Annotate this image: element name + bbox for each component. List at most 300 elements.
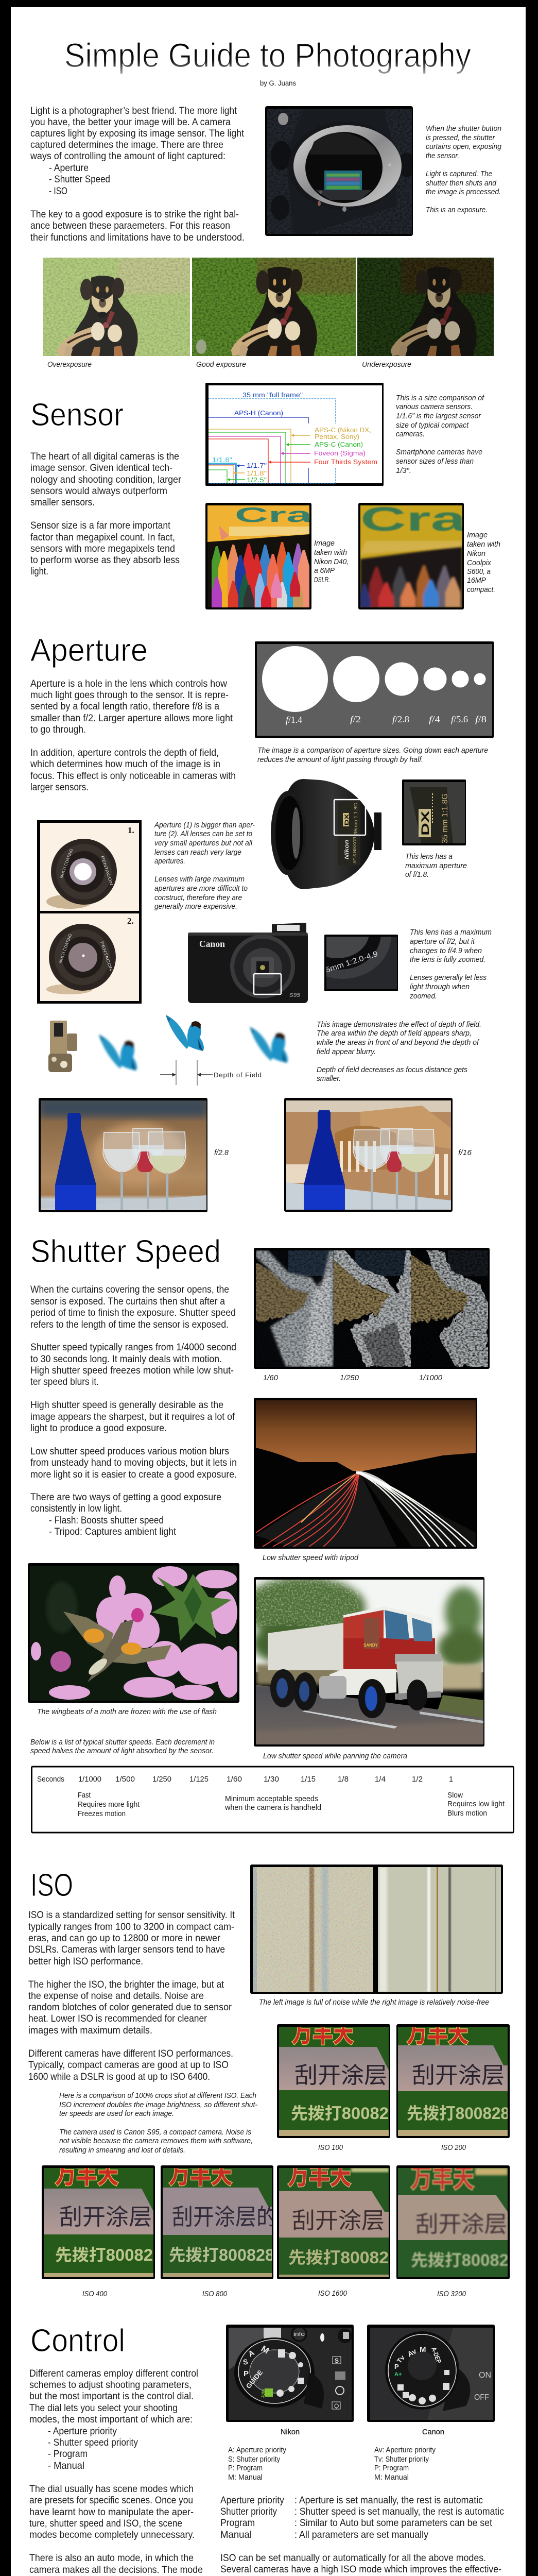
caption: list of shutter speeds xyxy=(30,1738,215,1755)
caption: sensor sizes: cameras. xyxy=(396,430,425,438)
control text block: - Shutter speed priority xyxy=(48,2437,138,2448)
photo: Nikon mode dial xyxy=(226,2325,354,2422)
shutter speed text block: High shutter speed is generally desirable as the xyxy=(30,1400,223,1411)
photo: Canon mode dial: OFF xyxy=(474,2393,489,2402)
intro text block: ways of controlling the amount of light captured: xyxy=(30,151,225,162)
caption: f/2 to f/4.9 lens: Lenses generally let less xyxy=(410,974,487,982)
control text block: - Manual xyxy=(48,2461,84,2471)
caption: aperture sizes xyxy=(154,821,255,911)
icon: sharp butterfly in focus xyxy=(166,1015,204,1051)
caption: sensor sizes: size of typical compact xyxy=(396,421,469,430)
caption: ISO crops: resulting in smearing and lost of details. xyxy=(59,2146,185,2155)
caption: f/2 to f/4.9 lens xyxy=(409,928,492,1001)
Nikon mode list: S: Shutter priority xyxy=(228,2455,281,2464)
control text block: modes, the most important of which are: xyxy=(29,2414,193,2425)
shutter speed table: Blurs motion xyxy=(447,1809,487,1818)
intro text block: ance between these paraemeters. For this reason xyxy=(30,221,230,231)
photo: crayons from Nikon D40 xyxy=(205,503,313,609)
intro text block: their functions and limitations have to be understood. xyxy=(30,232,245,243)
intro text block xyxy=(30,106,245,243)
caption: noise comparison: The left image is full of noise while the right image is relatively noise-free xyxy=(259,1998,489,2007)
shutter speed table: 1/500 xyxy=(115,1775,135,1784)
photo: Canon mode dial: Av xyxy=(406,2347,418,2359)
label: Canon: Canon xyxy=(422,2428,444,2436)
crop: ISO 800 xyxy=(161,2160,277,2279)
shutter speed text block xyxy=(30,1284,237,1537)
caption: aperture sizes: Lenses with large maximum xyxy=(154,875,245,884)
caption: Coolpix S600: taken with xyxy=(467,540,500,549)
crop: ISO 100 xyxy=(277,2019,390,2138)
photo: lens marking close-up: DX xyxy=(420,811,431,836)
sensor text block: sensors with more megapixels tend xyxy=(30,544,175,554)
control text block: schemes to adjust shooting parameters, xyxy=(29,2380,192,2391)
icon: camera side view xyxy=(48,1021,77,1072)
Canon mode list: Av: Aperture priority xyxy=(374,2446,436,2454)
shutter speed text block: High shutter speed freezes motion while low shut- xyxy=(30,1365,234,1376)
caption: depth of field: This image demonstrates the effect of depth of field. xyxy=(317,1021,481,1029)
shutter speed table: when the camera is handheld xyxy=(224,1804,321,1812)
shutter speed text block: - Flash: Boosts shutter speed xyxy=(49,1515,164,1526)
photo: crayons from Coolpix S600 xyxy=(358,500,467,609)
photo: Nikon mode dial: S xyxy=(242,2358,249,2366)
ISO text block: heat. Lower ISO is recommended for cleaner xyxy=(28,2013,207,2024)
crop: ISO 200: 万丰天 xyxy=(407,2019,468,2048)
caption: moth: The wingbeats of a moth are frozen with the use of flash xyxy=(37,1708,217,1716)
aperture text block: In addition, aperture controls the depth of field, xyxy=(30,748,219,758)
ISO mode note xyxy=(220,2553,501,2576)
sensor size comparison chart: 1/1.8" xyxy=(247,469,267,477)
caption: Nikon D40: Nikon D40, xyxy=(314,558,349,566)
ISO text block: Different cameras have different ISO performances. xyxy=(28,2048,233,2059)
caption: exposure: This is an exposure. xyxy=(426,206,488,214)
photo: waterfall at three shutter speeds xyxy=(252,1248,490,1369)
caption: sensor sizes: 1/3″. xyxy=(396,467,411,475)
photo: Canon lens marking close-up: 5mm 1:2.0-4.9 xyxy=(324,950,379,975)
ISO text block: ISO is a standardized setting for sensor sensitivity. It xyxy=(28,1910,235,1921)
aperture text block: larger sensors. xyxy=(30,782,89,793)
Nikon mode list: P: Program xyxy=(228,2464,263,2472)
sensor size comparison chart: 35 mm "full frame" xyxy=(242,391,303,399)
aperture text block: Aperture is a hole in the lens which controls how xyxy=(30,679,227,689)
sensor size comparison chart: APS-C (Nikon DX, xyxy=(315,426,371,434)
heading: Aperture: Aperture xyxy=(30,633,148,668)
shutter speed text block: consistently in low light. xyxy=(30,1503,122,1514)
shutter speed table: 1/2 xyxy=(412,1775,423,1784)
caption: depth of field: Depth of field decreases as focus distance gets xyxy=(317,1066,467,1074)
mode definitions table: : Shutter speed is set manually, the rest is automatic xyxy=(294,2506,504,2517)
ISO 400 to 3200 labels: ISO 1600 xyxy=(318,2290,347,2298)
ISO text block: Typically, compact cameras are good at up to ISO xyxy=(28,2060,229,2071)
shutter speed text block: to 30 seconds long. It mainly deals with motion. xyxy=(30,1354,222,1365)
sensor text block: factor than megapixel count. In fact, xyxy=(30,532,175,543)
ISO 100 and 200 labels: ISO 100 xyxy=(318,2144,343,2152)
caption: ISO crops: Here is a comparison of 100% crops shot at different ISO. Each xyxy=(59,2092,256,2100)
ISO text block: eras, and can go up to 12800 or more in newer xyxy=(28,1933,221,1944)
sensor text block xyxy=(30,451,182,577)
sensor size comparison chart xyxy=(205,383,384,486)
mode definitions table: Manual xyxy=(220,2530,252,2540)
ISO 100 and 200 labels xyxy=(318,2144,466,2152)
photo: Canon mode dial: ON xyxy=(479,2371,491,2380)
ISO text block: The higher the ISO, the brighter the image, but at xyxy=(28,1979,224,1990)
caption: Coolpix S600: Nikon xyxy=(467,550,485,558)
aperture text block: sented by a focal length ratio, therefore f/8 is a xyxy=(30,701,219,712)
shutter labels xyxy=(263,1374,442,1382)
caption: Coolpix S600: compact. xyxy=(467,586,495,594)
shutter speed table xyxy=(32,1767,514,1833)
photo: Nikon 35mm lens: DX xyxy=(344,814,350,825)
aperture text block: which determines how much of the image is in xyxy=(30,759,220,770)
crop: ISO 800: 万丰天 xyxy=(169,2160,232,2190)
photo: Nikon mode dial: P xyxy=(244,2369,249,2378)
photo: hawk moth on flowers xyxy=(28,1563,241,1703)
sensor size comparison chart: Four Thirds System xyxy=(314,458,377,466)
photo: bottle and glasses at f/2.8 xyxy=(39,1098,207,1216)
caption: depth of field: The area within the depth of field appears sharp, xyxy=(317,1029,472,1038)
intro text block: you have, the better your image will be. A camera xyxy=(30,117,231,128)
control text block: There is also an auto mode, in which the xyxy=(29,2553,194,2564)
caption: exposure: shutter then shuts and xyxy=(426,179,497,188)
caption: exposure: When the shutter button xyxy=(426,125,501,133)
aperture text block: to go through. xyxy=(30,724,86,735)
crop: ISO 3200: 万丰天 xyxy=(411,2164,474,2194)
ISO 400 to 3200 labels: ISO 3200 xyxy=(437,2290,466,2298)
caption: f/1.8 lens xyxy=(405,853,467,879)
crop: ISO 100: 万丰天 xyxy=(292,2019,354,2048)
sensor text block: sensors would always outperform xyxy=(30,486,167,497)
pane: noisy image xyxy=(253,1867,373,1992)
shutter speed text block: period of time to finish the exposure. Shutter speed xyxy=(30,1308,236,1318)
exposure captions: Overexposure xyxy=(47,361,92,369)
photo: Canon mode dial xyxy=(367,2325,495,2422)
caption: Nikon D40 xyxy=(314,539,349,584)
mode definitions table: Program xyxy=(220,2518,255,2529)
photo: Canon lens marking close-up xyxy=(293,891,398,991)
Nikon mode list xyxy=(228,2446,287,2482)
crop: ISO 1600 xyxy=(277,2161,390,2279)
photo: Nikon mode dial: info xyxy=(293,2331,305,2337)
caption: exposure: is pressed, the shutter xyxy=(426,134,495,142)
caption: exposure: Light is captured. The xyxy=(426,170,492,178)
shutter speed text block: light to produce a good exposure. xyxy=(30,1423,167,1434)
sensor size comparison chart: 1/2.5" xyxy=(247,476,267,484)
heading: ISO: ISO xyxy=(30,1868,73,1903)
caption: list of shutter speeds: speed halves the amount of light absorbed by the sensor. xyxy=(30,1747,214,1755)
label: depth of field: Depth of Field xyxy=(214,1071,262,1079)
lens at aperture 1: PENTACON xyxy=(100,855,114,886)
aperture size comparison panel xyxy=(255,641,494,738)
heading: Shutter Speed: Shutter Speed xyxy=(30,1234,221,1269)
aperture text block: smaller than f/2. Larger aperture allows more light xyxy=(30,713,233,724)
caption: sensor sizes xyxy=(396,394,485,475)
photo: camera lens mount with exposed sensor xyxy=(265,106,415,236)
Canon mode list: Tv: Shutter priority xyxy=(374,2455,429,2464)
shutter speed table: Fast xyxy=(78,1791,91,1800)
control text block xyxy=(29,2368,203,2576)
shutter speed table: 1/250 xyxy=(152,1775,171,1784)
aperture size comparison panel: f/8 xyxy=(475,714,487,724)
intro text block: Light is a photographer’s best friend. The more light xyxy=(30,106,237,116)
pane: clean image xyxy=(378,1867,501,1992)
lens at aperture 1: MULTI COATING xyxy=(59,848,74,879)
control text block: ture, shutter speed and ISO, the scene xyxy=(29,2518,182,2529)
control text block: Different cameras employ different control xyxy=(29,2368,198,2379)
lens at aperture 1 xyxy=(40,823,139,911)
caption: Nikon D40: Image xyxy=(314,539,335,548)
shutter speed table: 1/4 xyxy=(375,1775,386,1784)
caption: depth of field: smaller. xyxy=(317,1075,341,1083)
shutter speed table: 1/60 xyxy=(227,1775,242,1784)
crop: ISO 800: 先拨打800828 xyxy=(169,2246,274,2264)
shutter speed table: 1/1000 xyxy=(78,1775,101,1784)
caption: panning: Low shutter speed while panning the camera xyxy=(263,1752,407,1760)
photo: Canon mode dial: M xyxy=(420,2345,426,2354)
photo: Nikon 35mm lens: Nikon xyxy=(344,840,350,859)
photo: underexposed dog xyxy=(357,258,494,356)
photo: Canon S95 camera: Canon xyxy=(199,939,225,949)
lens at aperture 2: MULTI COATING xyxy=(58,933,73,964)
caption: aperture sizes: lenses can reach very large xyxy=(154,849,241,857)
sensor size comparison chart: 1/1.6" xyxy=(212,456,232,464)
photo pair: two aperture settings xyxy=(37,820,142,1004)
lens at aperture 1: 1. xyxy=(128,825,134,835)
shutter speed text block: - Tripod: Captures ambient light xyxy=(49,1527,177,1537)
ISO mode note: Several cameras have a high ISO mode which improves the effective- xyxy=(220,2564,501,2575)
shutter speed text block: When the curtains covering the sensor opens, the xyxy=(30,1284,229,1295)
caption: sensor sizes: sensor sizes of less than xyxy=(396,457,474,466)
crop: ISO 200 xyxy=(396,2019,510,2138)
sensor size comparison chart: APS-C (Canon) xyxy=(315,440,363,448)
shutter speed text block: image appears the sharpest, but it requires a lot of xyxy=(30,1412,235,1422)
shutter speed text block: ter speed blurs it. xyxy=(30,1377,99,1387)
aperture text block xyxy=(30,679,236,793)
control text block: but the most important is the control dial. xyxy=(29,2391,194,2402)
crop: ISO 400 xyxy=(42,2160,155,2279)
photo: Canon mode dial: A+ xyxy=(394,2371,402,2378)
pane: 1/250 xyxy=(334,1250,411,1367)
Nikon mode list: M: Manual xyxy=(228,2473,263,2482)
caption: Nikon D40: DSLR. xyxy=(314,576,330,584)
Canon mode list: P: Program xyxy=(374,2464,409,2472)
caption: f/2 to f/4.9 lens: light through when xyxy=(410,983,470,991)
control text block: - Program xyxy=(48,2449,88,2460)
photo: Nikon 35mm lens: 35mm 1:1.8G xyxy=(353,803,358,835)
caption: Coolpix S600: 16MP xyxy=(467,577,486,585)
caption: aperture sizes: apertures. xyxy=(154,857,185,866)
Canon mode list: M: Manual xyxy=(374,2473,409,2482)
sensor size comparison chart: APS-H (Canon) xyxy=(234,409,283,417)
caption: aperture comparison: The image is a comparison of aperture sizes. Going down each aperture xyxy=(257,747,488,755)
control text block: The dial lets you select your shooting xyxy=(29,2403,178,2414)
photo: bottle and glasses at f/16 xyxy=(284,1098,453,1214)
aperture size comparison panel: f/1.4 xyxy=(286,715,302,725)
shutter speed table: Minimum acceptable speeds xyxy=(225,1795,318,1803)
caption: exposure: curtains open, exposing xyxy=(426,143,501,151)
photo: Nikon 35mm lens: AF-S NIKKOR xyxy=(353,837,357,863)
aperture text block: focus. This effect is only noticeable in cameras with xyxy=(30,771,236,782)
caption: sensor sizes: This is a size comparison of xyxy=(396,394,485,402)
aperture size comparison panel: f/4 xyxy=(429,714,440,724)
crop: ISO 1600: 刮开涂层 xyxy=(292,2208,385,2233)
aperture size comparison panel: f/2 xyxy=(350,714,361,724)
shutter speed table: 1/15 xyxy=(301,1775,316,1784)
caption: f/2 to f/4.9 lens: zoomed. xyxy=(409,992,437,1001)
lens at aperture 2: PENTACON xyxy=(99,941,113,972)
photo: panning truck xyxy=(242,1577,489,1747)
photo: well exposed dog xyxy=(192,258,356,356)
crop: ISO 3200: 刮开涂层 xyxy=(415,2212,507,2237)
shutter speed table: 1/30 xyxy=(264,1775,279,1784)
photo: highway light trails xyxy=(254,1398,477,1549)
control text block: are presets for specific scenes. Once you xyxy=(29,2495,193,2506)
mode definitions table: : Aperture is set manually, the rest is automatic xyxy=(294,2495,483,2506)
lens at aperture 2: 2. xyxy=(127,916,134,926)
intro text block: captures light by exposing its image sensor. The light xyxy=(30,128,245,139)
intro text block: captured determines the image. There are three xyxy=(30,140,223,150)
caption: aperture comparison: reduces the amount of light passing through by half. xyxy=(257,756,423,764)
depth of field diagram xyxy=(48,1015,288,1086)
caption: ISO crops: ISO increment doubles the image brightness, so different shut- xyxy=(59,2101,257,2109)
sensor text block: Sensor size is a far more important xyxy=(30,520,171,531)
shutter speed text block: sensor is exposed. The curtains then shut after a xyxy=(30,1296,225,1307)
crop: ISO 400: 刮开涂层 xyxy=(59,2205,152,2230)
shutter speed table: Seconds xyxy=(37,1775,64,1784)
heading: Control: Control xyxy=(30,2323,125,2359)
icon: blurred butterfly in front xyxy=(99,1035,137,1071)
caption: aperture sizes: Aperture (1) is bigger than aper- xyxy=(154,821,255,829)
shutter speed text block: Shutter speed typically ranges from 1/4000 second xyxy=(30,1342,236,1353)
ISO text block: better high ISO performance. xyxy=(28,1956,143,1967)
photo: Nikon mode dial: AUTO xyxy=(260,2389,267,2398)
intro text block: - ISO xyxy=(49,186,67,197)
photo: Canon S95 camera xyxy=(188,923,308,1003)
mode definitions table: Aperture priority xyxy=(220,2495,284,2506)
pane: 1/60 xyxy=(256,1250,334,1367)
mode definitions table: Shutter priority xyxy=(220,2506,277,2517)
shutter labels: 1/60 xyxy=(263,1374,278,1382)
label: Nikon: Nikon xyxy=(281,2428,300,2436)
photo: Nikon mode dial: M xyxy=(259,2344,271,2356)
caption: ISO crops: ter speeds are used for each image. xyxy=(59,2110,174,2118)
caption: aperture sizes: generally more expensive. xyxy=(154,903,237,911)
lens at aperture 2 xyxy=(40,913,139,1001)
ISO text block xyxy=(28,1910,235,2082)
photo: Canon mode dial: P xyxy=(394,2363,399,2370)
control text block: have learnt how to manipulate the aper- xyxy=(29,2507,194,2518)
caption: ISO crops: The camera used is Canon S95, a compact camera. Noise is xyxy=(59,2128,251,2137)
shutter speed table: 1 xyxy=(449,1775,453,1784)
caption: f/2 to f/4.9 lens: changes to f/4.9 when xyxy=(410,947,482,955)
caption: f/1.8 lens: maximum aperture xyxy=(405,862,467,870)
photo: Canon mode dial: Tv xyxy=(395,2353,407,2365)
caption: aperture sizes: apertures are more difficult to xyxy=(154,885,248,893)
crop: ISO 1600: 先拨打80082 xyxy=(288,2248,389,2267)
ISO text block: random blotches of color generated due to sensor xyxy=(28,2002,232,2013)
photo: Nikon mode dial: A xyxy=(247,2348,256,2359)
shutter speed text block: There are two ways of getting a good exposure xyxy=(30,1492,221,1503)
photo: crayons from Nikon D40: Cra xyxy=(235,504,313,527)
aperture text block: much light goes through to the sensor. It is repre- xyxy=(30,690,229,701)
shutter speed table: Slow xyxy=(447,1791,463,1800)
ISO mode note: ISO can be set manually or automatically for all the above modes. xyxy=(220,2553,486,2564)
photo: noisy vs clean comparison xyxy=(250,1865,503,1994)
sensor size comparison chart: Foveon (Sigma) xyxy=(314,449,366,457)
caption: ISO crops: not visible because the camera removes them with software, xyxy=(59,2137,253,2145)
icon: blurred butterfly behind xyxy=(250,1027,288,1063)
crop: ISO 200: 刮开涂层 xyxy=(412,2063,505,2088)
aperture size comparison panel: f/2.8 xyxy=(392,714,409,724)
caption: depth of field: while the areas in front of and beyond the depth of xyxy=(317,1039,480,1047)
exposure captions: Good exposure xyxy=(196,361,246,369)
intro text block: - Shutter Speed xyxy=(49,174,110,185)
caption: f/1.8 lens: of f/1.8. xyxy=(405,871,429,879)
caption: Coolpix S600 xyxy=(467,531,500,594)
crop: ISO 200: 先拨打800828 xyxy=(407,2104,510,2123)
crop: ISO 400: 万丰天 xyxy=(55,2160,118,2190)
control text block: modes become completely unnecessary. xyxy=(29,2530,195,2540)
title: Simple Guide to Photography xyxy=(64,36,471,74)
photo: panning truck: SANDY xyxy=(363,1643,378,1648)
ISO 400 to 3200 labels: ISO 800 xyxy=(202,2290,227,2298)
caption: list of shutter speeds: Below is a list of typical shutter speeds. Each decrement in xyxy=(30,1738,215,1747)
caption: depth of field xyxy=(317,1021,481,1083)
intro text block: - Aperture xyxy=(49,163,89,174)
ISO text block: the expense of noise and details. Noise are xyxy=(28,1991,204,2002)
photo: Nikon mode dial: GUIDE xyxy=(245,2368,265,2390)
shutter speed text block: from unsteady hand to moving objects, but it lets in xyxy=(30,1458,237,1468)
photo: Canon S95 camera: S95 xyxy=(289,992,301,998)
depth of field markers xyxy=(160,1060,213,1086)
caption: f/2 to f/4.9 lens: This lens has a maximum xyxy=(410,928,492,937)
ISO 400 to 3200 labels xyxy=(82,2290,466,2298)
exposure captions: Underexposure xyxy=(362,361,411,369)
Canon mode list xyxy=(374,2446,436,2482)
mode definitions table: : All parameters are set manually xyxy=(294,2530,428,2540)
shutter speed text block: refers to the length of time the sensor is exposed. xyxy=(30,1319,229,1330)
caption: exposure: the sensor. xyxy=(426,152,459,160)
shutter speed table: Requires low light xyxy=(447,1800,505,1808)
caption: Nikon D40: a 6MP xyxy=(314,567,335,575)
crop: ISO 100: 刮开涂层 xyxy=(294,2063,387,2088)
caption: aperture sizes: construct, therefore they are xyxy=(154,894,242,902)
shutter speed text block: more light so it is easier to create a good exposure. xyxy=(30,1469,237,1480)
caption: sensor sizes: Smartphone cameras have xyxy=(396,448,482,456)
crop: ISO 400: 先拨打80082 xyxy=(55,2246,153,2264)
crop: ISO 100: 先拨打80082 xyxy=(291,2104,389,2123)
photo: Nikon mode dial: S xyxy=(335,2357,339,2364)
sensor text block: The heart of all digital cameras is the xyxy=(30,451,179,462)
crop: ISO 3200 xyxy=(396,2164,510,2279)
caption: exposure xyxy=(426,125,501,214)
sensor size comparison chart: 1/1.7" xyxy=(247,462,267,469)
ISO text block: typically ranges from 100 to 3200 in compact cam- xyxy=(28,1922,234,1933)
shutter labels: 1/250 xyxy=(340,1374,359,1382)
photo: overexposed dog xyxy=(43,258,190,356)
label: f/16: f/16 xyxy=(458,1149,472,1157)
sensor text block: image sensor. Given identical tech- xyxy=(30,463,172,473)
intro text block: The key to a good exposure is to strike the right bal- xyxy=(30,209,239,220)
caption: ISO crops xyxy=(59,2092,257,2155)
photo: crayons from Coolpix S600: Cra xyxy=(360,500,467,538)
mode definitions table: : Similar to Auto but some parameters can be set xyxy=(294,2518,493,2529)
shutter speed table: Freezes motion xyxy=(78,1810,126,1818)
sensor text block: to perform worse as they absorb less xyxy=(30,555,180,566)
control text block: camera makes all the decisions. The mode xyxy=(29,2565,203,2575)
photo: lens marking close-up xyxy=(402,779,466,845)
label: f/2.8: f/2.8 xyxy=(214,1149,229,1157)
caption: Nikon D40: taken with xyxy=(314,549,347,557)
ISO text block: images with maximum details. xyxy=(28,2025,152,2036)
